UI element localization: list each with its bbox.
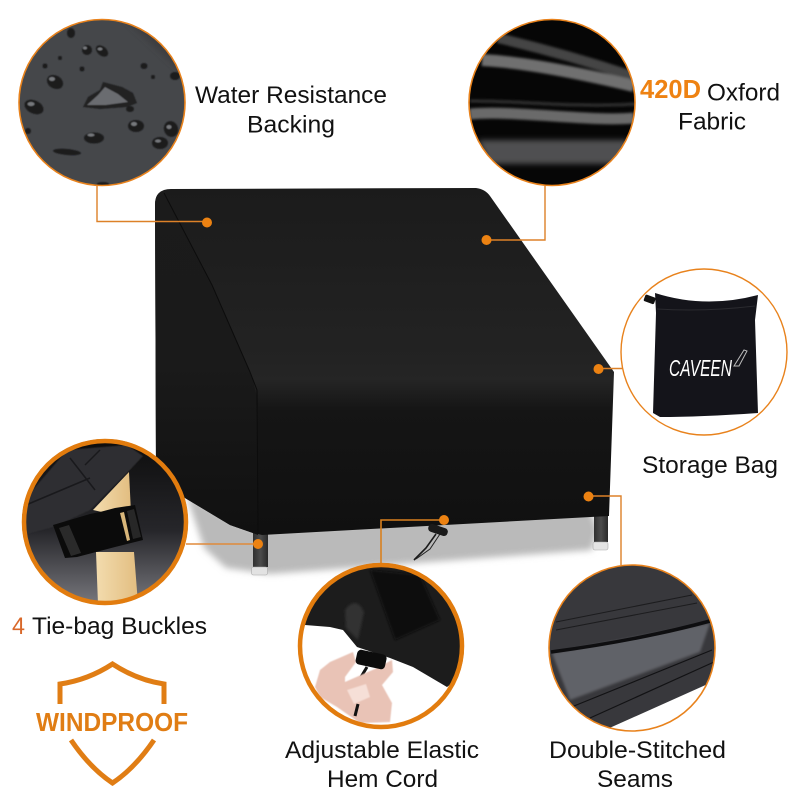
marker dot [594,364,604,374]
label [195,82,387,138]
circle outline [621,269,787,435]
ground shadow [186,494,598,574]
label [285,737,479,793]
buckle photo [20,437,190,607]
product: chair cover [155,188,614,575]
fabric swatch [470,20,634,185]
drawstring toggle [414,523,449,560]
label: Oxford [707,80,780,106]
leader line [603,368,622,370]
fabric swatch with water drops [20,20,184,185]
leader line [486,186,545,240]
circle outline [469,20,635,186]
cover seam line [164,193,258,534]
label [640,74,780,136]
circle outline [300,565,462,727]
panel: double-stitched seams [545,492,726,793]
label: 4 [12,613,25,640]
circle outline [24,441,186,603]
cover side panel [155,191,258,535]
label: Tie-bag Buckles [32,613,207,640]
storage bag image [643,293,758,417]
label [549,737,726,793]
cover body [155,188,614,535]
marker dot [584,492,594,502]
label: 420D [640,74,701,104]
panel: storage bag [594,269,787,479]
badge: windproof shield [36,664,188,783]
label: Fabric [678,108,746,136]
label: Storage Bag [642,452,778,479]
leader line [381,520,444,563]
right leg [593,514,608,550]
label: Seams [597,766,673,793]
label: Hem Cord [327,766,438,793]
storage bag image: CAVEEN [669,355,732,381]
label: Water Resistance [195,82,387,109]
leader line [588,496,621,565]
shield bottom [71,740,154,783]
marker dot [202,218,212,228]
leader line [97,186,207,222]
panel: oxford fabric [465,15,780,245]
panel: adjustable hem cord [285,515,479,793]
marker dot [253,539,263,549]
circle outline [549,565,715,731]
hem cord photo [300,560,470,723]
circle outline [19,20,185,186]
leader line [186,543,258,545]
left leg [252,532,268,575]
circle white background [298,563,464,729]
shield top [60,664,164,704]
marker dot [482,235,492,245]
label: Double-Stitched [549,737,726,764]
panel: tie-bag buckles [12,437,263,640]
seam photo [550,566,714,728]
panel: water resistance [15,15,387,228]
windproof text: WINDPROOF [36,707,188,737]
circle white background [621,269,787,435]
label: Adjustable Elastic [285,737,479,764]
label: Backing [247,112,335,138]
marker dot [439,515,449,525]
